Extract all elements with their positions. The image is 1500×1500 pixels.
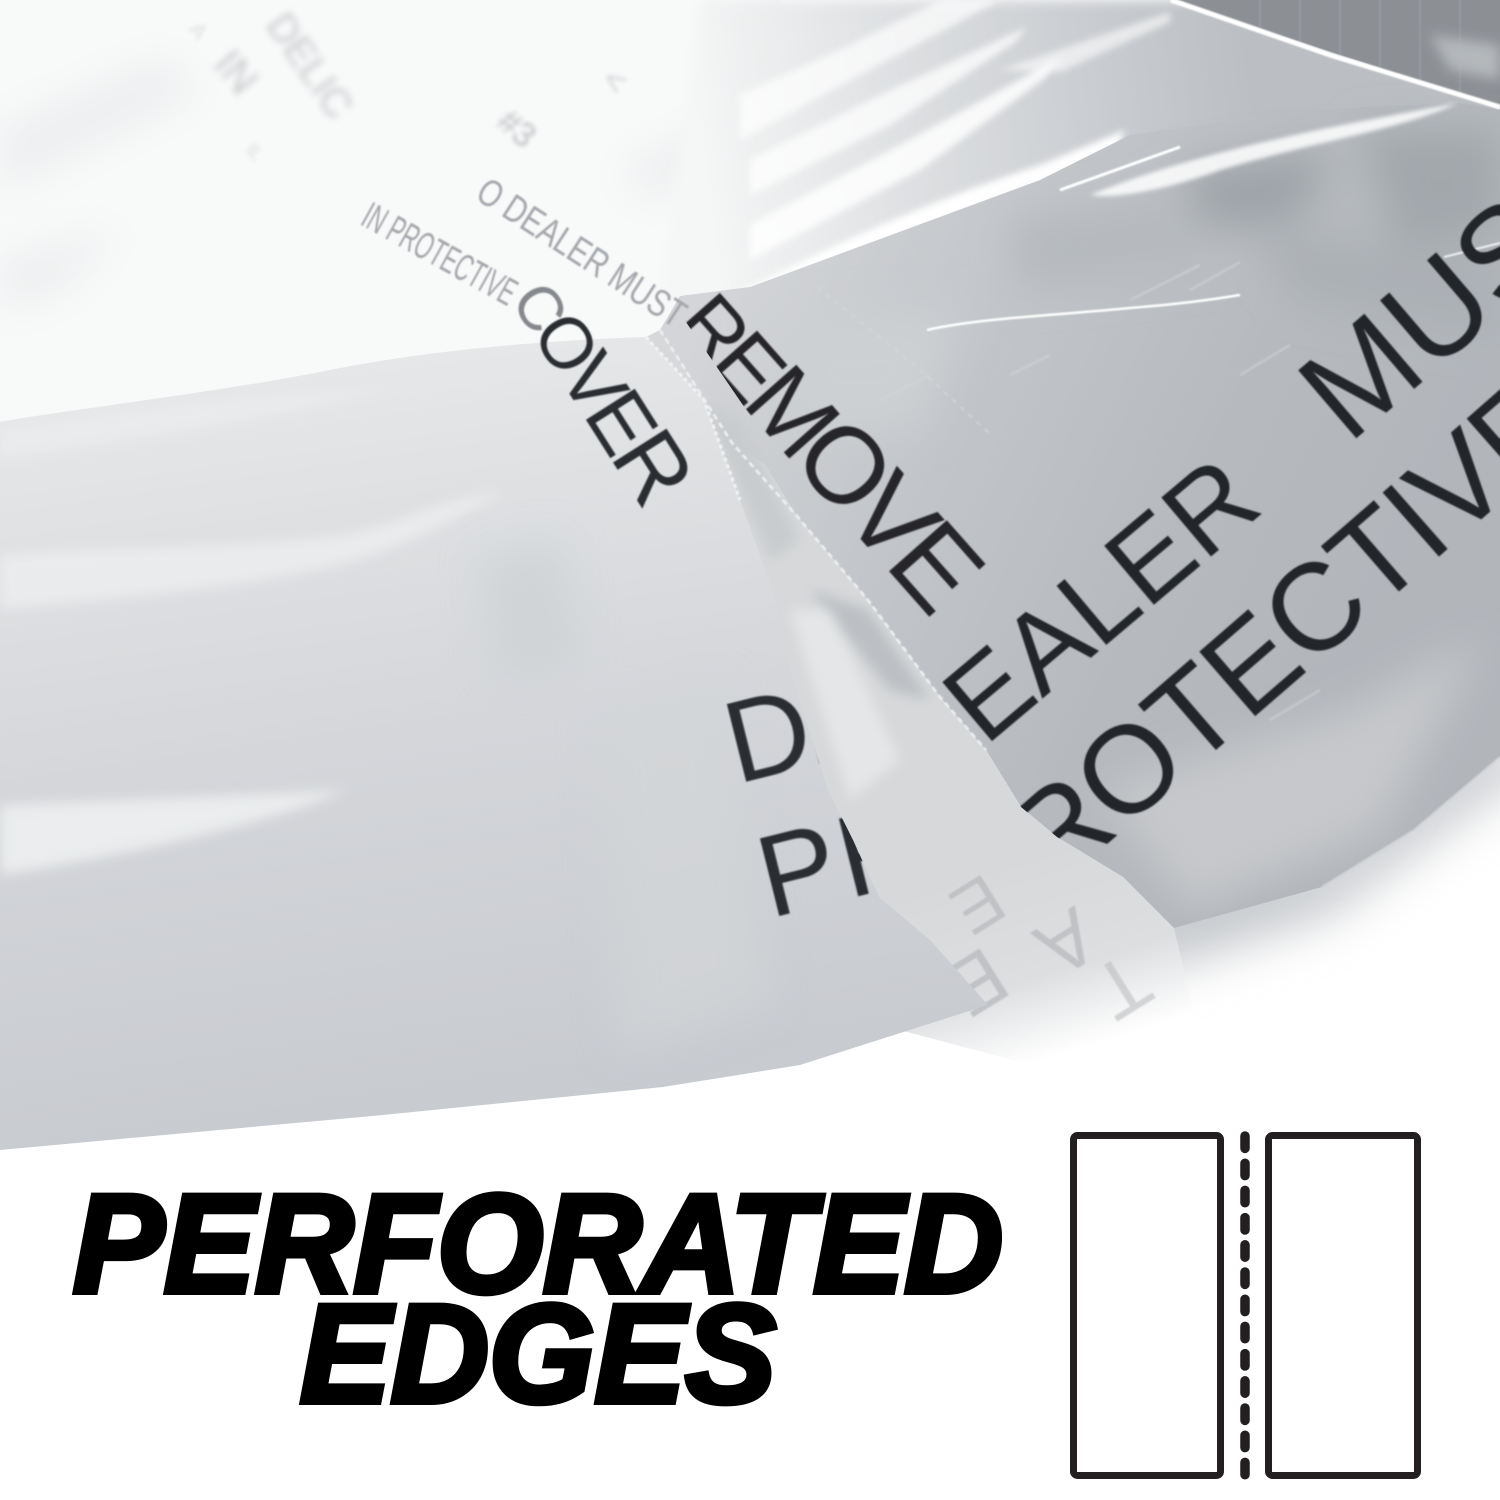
title: PERFORATED EDGES	[73, 1165, 1003, 1432]
right panel shading	[760, 130, 1500, 910]
printed text: DE PR on flap	[726, 694, 870, 917]
wispy highlight across right panel	[1090, 103, 1458, 196]
faint mirrored print: A	[1020, 891, 1113, 995]
printed text: DE PR on flap: DE	[712, 646, 887, 808]
printed text: REMOVE: REMOVE	[686, 292, 986, 618]
left panel soft shading	[480, 540, 770, 1050]
flap wedge between panels	[646, 330, 1200, 1062]
corner scratches	[1260, 0, 1460, 93]
faint mirrored print: E	[937, 859, 1018, 950]
faint mirrored print	[931, 859, 1166, 1037]
faint print: upper left: IN PROTECTIVE	[355, 195, 524, 314]
faint print: upper left: #3	[490, 102, 543, 155]
left panel	[0, 337, 988, 1152]
right sheet	[1268, 1136, 1418, 1476]
icon: perforated sheet	[1074, 1136, 1418, 1476]
left panel highlights	[0, 385, 505, 875]
faint print: upper left: O DEALER MUST	[469, 170, 693, 336]
bright film edge lines	[927, 0, 1500, 330]
printed text: DE PR on flap: PR	[745, 775, 940, 942]
printed text: COVER: COVER	[518, 286, 688, 510]
white streaks	[690, 0, 1170, 320]
top right streak area	[660, 0, 1500, 300]
faint mirrored print: E	[931, 931, 1023, 1034]
title line 2: EDGES	[300, 1275, 776, 1432]
faint print: upper left: IN	[205, 41, 268, 103]
faint print: upper left: DELIC	[258, 5, 361, 127]
right panel	[660, 103, 1500, 928]
scratches on right panel	[880, 262, 1320, 720]
perforation line	[1240, 1136, 1250, 1475]
wedge shading	[700, 400, 930, 800]
faint mirrored print: T	[1078, 936, 1166, 1037]
pale folds upper left	[0, 60, 750, 310]
title line 1: PERFORATED	[73, 1165, 1003, 1322]
faint print: upper left	[184, 5, 693, 336]
left sheet	[1074, 1136, 1220, 1476]
soft fade under the bag	[1100, 730, 1500, 975]
photo: clear bag with perforated seam	[0, 0, 1500, 1192]
dark corner above the film edge	[1171, 0, 1500, 107]
upper left bright film	[0, 0, 780, 440]
faint print: upper left: IL	[242, 140, 267, 164]
corner glow	[1430, 35, 1500, 80]
faint print: upper left: <	[595, 60, 633, 103]
perforated seam	[646, 287, 1500, 887]
faint print: upper left: A	[184, 17, 213, 45]
